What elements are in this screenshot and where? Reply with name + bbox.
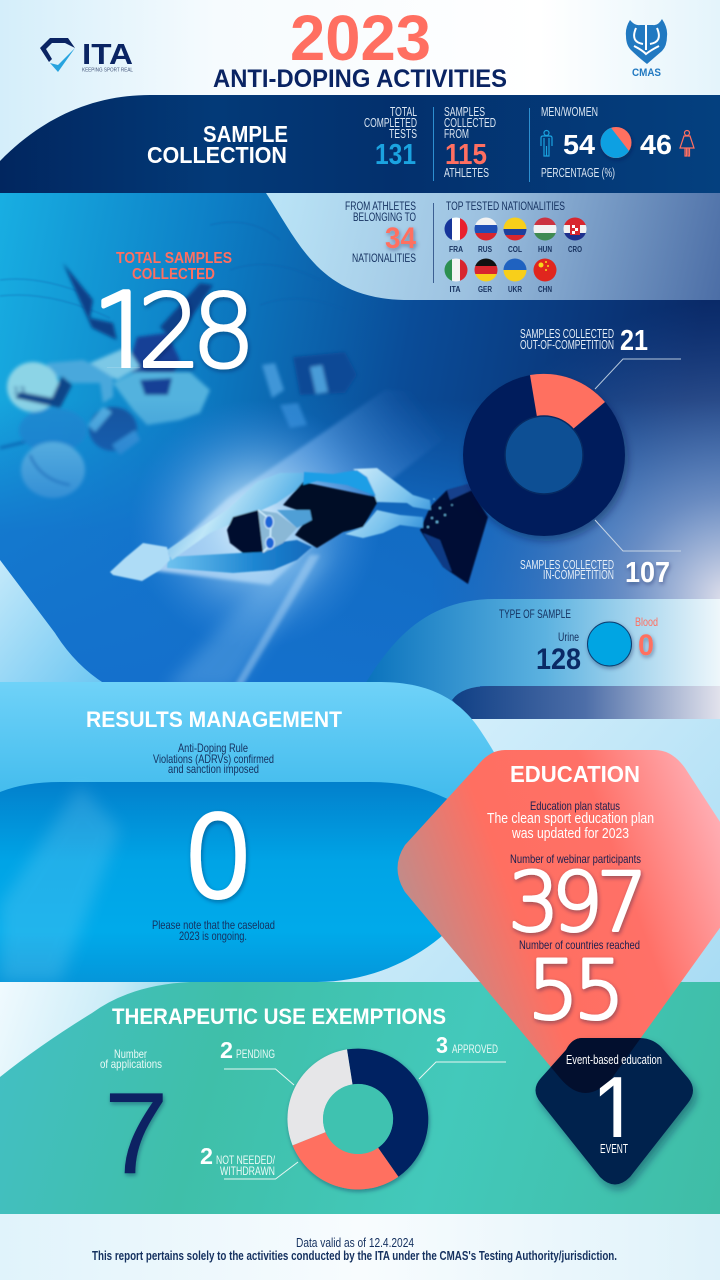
flag: Croatia <box>563 217 587 241</box>
stat: total samples collected: COLLECTED <box>132 266 215 283</box>
callout: out of competition: SAMPLES COLLECTED <box>520 327 614 341</box>
callout: not needed or withdrawn: 2 <box>200 1143 213 1169</box>
flag: Colombia <box>503 217 527 241</box>
top right panel background <box>266 193 720 300</box>
hand <box>110 543 170 581</box>
sample collection band <box>0 95 720 193</box>
stat: men and women percentage: PERCENTAGE (%) <box>541 166 615 180</box>
stat: athletes: ATHLETES <box>444 166 489 180</box>
stat: total completed tests: 131 <box>375 139 416 171</box>
type of sample: TYPE OF SAMPLE <box>499 607 571 621</box>
lower arm <box>167 540 312 573</box>
panel: results management <box>0 682 512 982</box>
stat: athletes: SAMPLES <box>444 105 485 119</box>
panel: education: 55 <box>528 944 625 1038</box>
type of sample: 128 <box>536 643 581 676</box>
lower left pale shape <box>0 560 105 684</box>
chart: sample type circle <box>588 622 632 666</box>
flag codes: HUN <box>538 245 552 254</box>
flag codes: GER <box>478 285 492 294</box>
heading: therapeutic use exemptions: THERAPEUTIC USE EXEMPTIONS <box>112 1004 446 1029</box>
callout: out of competition: 21 <box>620 325 648 357</box>
stat: nationalities: 34 <box>385 222 416 255</box>
callout: out of competition: OUT-OF-COMPETITION <box>520 338 614 352</box>
fin <box>420 484 488 584</box>
stat: number of applications: 7 <box>104 1068 169 1198</box>
callout: pending: PENDING <box>236 1047 275 1061</box>
callout: in competition <box>520 520 681 589</box>
callout: in competition: 107 <box>625 557 670 589</box>
lower background <box>0 719 720 989</box>
water polo players in background photo: 13 <box>13 385 25 397</box>
flag codes: ITA <box>450 285 461 294</box>
flag codes: CHN <box>538 285 552 294</box>
stat: men and women percentage: 54 <box>563 129 595 160</box>
flag: Russia <box>474 217 498 241</box>
panel: education: 397 <box>508 856 648 950</box>
flag codes <box>449 245 582 294</box>
panel: education <box>398 750 720 1093</box>
panel: therapeutic use exemptions background <box>0 982 720 1214</box>
stat: total completed tests: COMPLETED <box>364 116 417 130</box>
flag: Germany <box>474 258 498 282</box>
icon: man <box>541 130 552 156</box>
callout: not needed or withdrawn: NOT NEEDED/ <box>216 1153 275 1167</box>
note: Please note that the caseload <box>152 918 275 932</box>
panel: event-based education <box>534 1038 700 1194</box>
stat: nationalities: NATIONALITIES <box>352 251 416 265</box>
panel: education: Number of webinar participants <box>510 852 641 866</box>
top tested nationalities flags <box>433 199 587 294</box>
stat: athletes <box>433 105 496 181</box>
callout: in competition: SAMPLES COLLECTED <box>520 558 614 572</box>
callout: approved <box>419 1032 506 1079</box>
logo: ITA <box>40 38 133 74</box>
top tested nationalities flags: TOP TESTED NATIONALITIES <box>446 199 565 213</box>
type of sample: Urine <box>558 630 579 644</box>
stat: men and women percentage <box>529 105 694 182</box>
panel: event-based education: EVENT <box>600 1142 628 1156</box>
logo: ITA: ITA <box>82 39 133 71</box>
description: and sanction imposed <box>168 762 259 776</box>
flag codes: CRO <box>568 245 582 254</box>
goggles <box>258 510 274 552</box>
logo: CMAS: CMAS <box>632 67 661 79</box>
flag: Italy <box>444 258 468 282</box>
footer <box>0 1214 720 1280</box>
flag: France <box>444 217 468 241</box>
note <box>152 918 275 943</box>
panel: education: The clean sport education plan <box>487 810 654 827</box>
title: ANTI-DOPING ACTIVITIES <box>213 65 507 93</box>
stat: athletes: COLLECTED <box>444 116 496 130</box>
stat: athletes: FROM <box>444 127 469 141</box>
title: 2023 <box>290 2 431 74</box>
logo: CMAS <box>626 19 667 79</box>
chart: men women pie <box>600 127 632 158</box>
panel: education: was updated for 2023 <box>511 825 629 842</box>
stat: total samples collected <box>101 252 250 374</box>
footer: Data valid as of 12.4.2024 <box>296 1235 414 1250</box>
title <box>213 2 507 93</box>
head <box>258 510 297 553</box>
stat: number of applications: of applications <box>100 1057 162 1071</box>
description <box>153 741 274 776</box>
type of sample: 0 <box>638 629 654 662</box>
callout: pending: 2 <box>220 1037 233 1063</box>
callout: in competition: IN-COMPETITION <box>543 568 614 582</box>
callout: approved: APPROVED <box>452 1042 498 1056</box>
description: Violations (ADRVs) confirmed <box>153 752 274 766</box>
upper arm <box>167 473 303 560</box>
stat: total samples collected: 28 <box>138 272 256 390</box>
stat: total samples collected: 1 <box>92 270 156 403</box>
heading: sample collection: COLLECTION <box>147 142 287 168</box>
type of sample panel background <box>365 599 720 719</box>
heading: RESULTS MANAGEMENT <box>86 707 343 732</box>
callout: not needed or withdrawn: WITHDRAWN <box>220 1164 275 1178</box>
type of sample <box>499 607 658 676</box>
stat: nationalities: BELONGING TO <box>353 210 416 224</box>
panel: event-based education: 1 <box>592 1056 640 1166</box>
panel: education: Education plan status <box>530 799 620 813</box>
heading: sample collection <box>147 121 288 168</box>
swimmer illustration <box>110 468 488 584</box>
panel: education: EDUCATION <box>510 761 640 787</box>
stat: total completed tests: TOTAL <box>390 105 417 119</box>
legs <box>353 468 431 510</box>
swimsuit <box>283 482 377 548</box>
stat: nationalities: FROM ATHLETES <box>345 199 416 213</box>
neck <box>277 510 312 528</box>
stat: men and women percentage: 46 <box>640 129 672 160</box>
stat: men and women percentage: MEN/WOMEN <box>541 105 598 119</box>
flag codes: RUS <box>478 245 493 254</box>
description: Anti-Doping Rule <box>178 741 248 755</box>
callout: pending <box>220 1037 294 1085</box>
heading: sample collection: SAMPLE <box>203 121 288 147</box>
callout: not needed or withdrawn <box>200 1143 298 1179</box>
type of sample: Blood <box>635 615 658 629</box>
header background <box>0 0 720 200</box>
big number: 0 <box>183 794 254 923</box>
callout: out of competition <box>520 325 681 389</box>
flag codes: FRA <box>449 245 463 254</box>
logo: ITA: KEEPING SPORT REAL <box>82 68 133 74</box>
stat: total samples collected: TOTAL SAMPLES <box>116 250 232 267</box>
stat: nationalities <box>345 199 416 265</box>
flag: Hungary <box>533 217 557 241</box>
stat: total completed tests: TESTS <box>389 127 417 141</box>
dark band <box>452 686 720 719</box>
icon: woman <box>680 130 694 156</box>
chart: TUE donut <box>287 1049 428 1189</box>
callout: approved: 3 <box>436 1032 448 1058</box>
stat: total completed tests <box>364 105 417 171</box>
flag: China <box>533 258 557 282</box>
stat: athletes: 115 <box>445 139 487 171</box>
flag codes: UKR <box>508 285 522 294</box>
water polo players in background photo <box>0 263 357 498</box>
stat: number of applications: Number <box>114 1047 147 1061</box>
chart: samples donut <box>463 374 625 536</box>
flag codes: COL <box>508 245 522 254</box>
underwater photo background <box>0 193 720 723</box>
note: 2023 is ongoing. <box>179 929 247 943</box>
flag: Ukraine <box>503 258 527 282</box>
panel: event-based education: Event-based education <box>566 1053 662 1067</box>
panel: education: Number of countries reached <box>519 938 640 952</box>
